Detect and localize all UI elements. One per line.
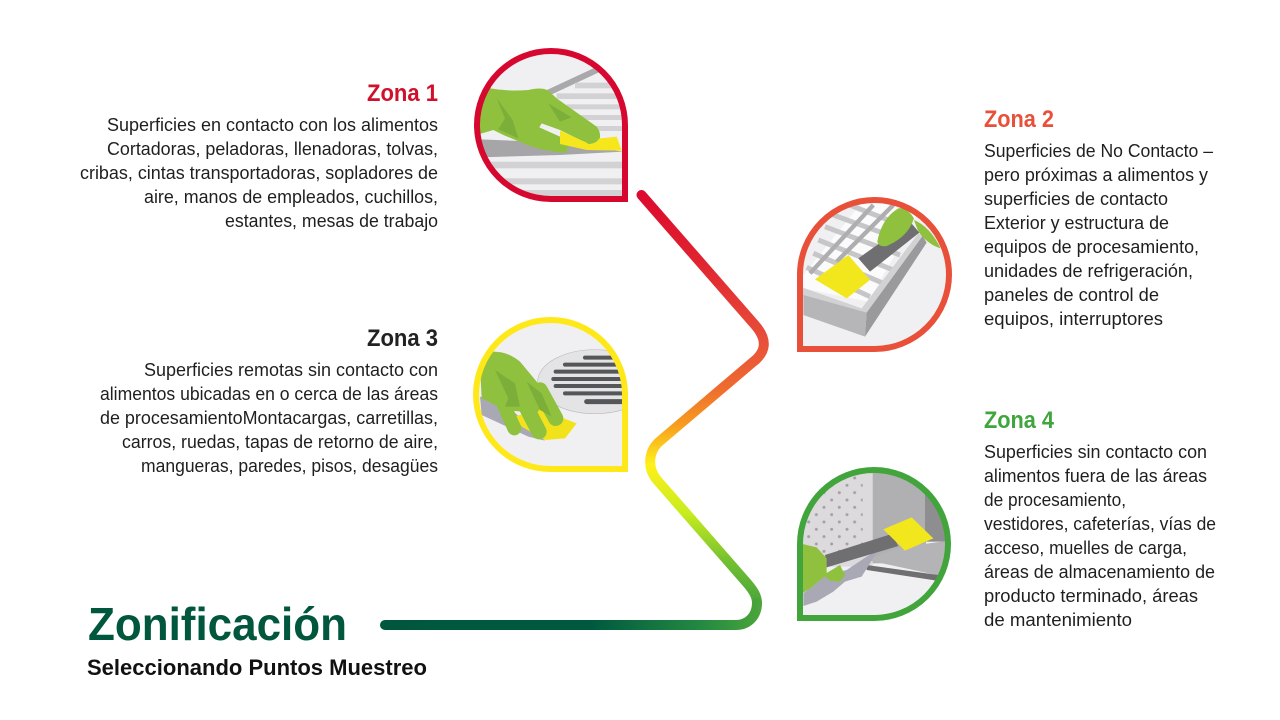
text block: Zona 1 description: Superficies en contacto con los alimentos bbox=[107, 115, 438, 135]
title: Zonificación bbox=[88, 598, 347, 650]
text block: Zona 3 description: carros, ruedas, tapas de retorno de aire, bbox=[122, 432, 438, 452]
text block: Zona 1 description: Cortadoras, peladoras, llenadoras, tolvas, bbox=[107, 139, 438, 159]
text block: Zona 3 description bbox=[100, 360, 438, 476]
text block: Zona 4 description bbox=[984, 442, 1216, 630]
icon: Zona 2 sponge on metal grate bbox=[797, 197, 952, 352]
drop outline: Zona 3 bbox=[476, 320, 625, 469]
text block: Zona 4 description: vestidores, cafeterías, vías de bbox=[984, 514, 1216, 534]
panel: Zona 1 text bbox=[80, 80, 438, 231]
drop outline: Zona 4 bbox=[800, 470, 948, 618]
text block: Zona 3 description: de procesamientoMontacargas, carretillas, bbox=[100, 408, 438, 428]
text block: Zona 2 description: superficies de contacto bbox=[984, 189, 1168, 209]
text block: Zona 2 description: paneles de control de bbox=[984, 285, 1159, 305]
text block: Zona 2 description: pero próximas a alimentos y bbox=[984, 165, 1208, 185]
text block: Zona 4 description: Superficies sin contacto con bbox=[984, 442, 1207, 462]
text block: Zona 1 description bbox=[80, 115, 438, 231]
connector line: upper gradient path bbox=[642, 195, 764, 603]
heading: Zona 2: Zona 2 bbox=[984, 106, 1054, 133]
text block: Zona 3 description: alimentos ubicadas en o cerca de las áreas bbox=[100, 384, 438, 404]
text block: Zona 1 description: estantes, mesas de trabajo bbox=[225, 211, 438, 231]
text block: Zona 4 description: acceso, muelles de carga, bbox=[984, 538, 1187, 558]
text block: Zona 2 description: equipos, interruptores bbox=[984, 309, 1163, 329]
panel: Zona 3 text bbox=[100, 325, 438, 476]
connector line: lower gradient path bbox=[385, 603, 757, 625]
icon: Zona 4 sponge wiping wall corner bbox=[797, 467, 953, 622]
text block: Zona 4 description: de mantenimiento bbox=[984, 610, 1132, 630]
text block: Zona 2 description: unidades de refrigeración, bbox=[984, 261, 1193, 281]
text block: Zona 4 description: alimentos fuera de las áreas bbox=[984, 466, 1207, 486]
icon: Zona 1 gloved hand wiping grate bbox=[474, 48, 628, 202]
text block: Zona 2 description: Superficies de No Contacto – bbox=[984, 141, 1213, 161]
drop outline: Zona 1 bbox=[477, 51, 625, 199]
icon: Zona 3 gloved hand wiping drain bbox=[473, 317, 628, 472]
text block: Zona 2 description bbox=[984, 141, 1213, 329]
text block: Zona 4 description: producto terminado, áreas bbox=[984, 586, 1198, 606]
text block: Zona 3 description: mangueras, paredes, pisos, desagües bbox=[141, 456, 438, 476]
subtitle: Seleccionando Puntos Muestreo bbox=[87, 655, 427, 680]
text block: Zona 4 description: de procesamiento, bbox=[984, 490, 1126, 510]
panel: Zona 4 text bbox=[984, 407, 1216, 630]
heading: Zona 1: Zona 1 bbox=[367, 80, 438, 107]
text block: Zona 2 description: equipos de procesamiento, bbox=[984, 237, 1199, 257]
text block: Zona 1 description: aire, manos de empleados, cuchillos, bbox=[144, 187, 438, 207]
heading: Zona 3: Zona 3 bbox=[367, 325, 438, 352]
text block: Zona 4 description: áreas de almacenamiento de bbox=[984, 562, 1215, 582]
text block: Zona 2 description: Exterior y estructura de bbox=[984, 213, 1169, 233]
heading: Zona 4: Zona 4 bbox=[984, 407, 1055, 434]
drop outline: Zona 2 bbox=[800, 200, 949, 349]
text block: Zona 3 description: Superficies remotas sin contacto con bbox=[144, 360, 438, 380]
panel: Zona 2 text bbox=[984, 106, 1213, 329]
text block: Zona 1 description: cribas, cintas transportadoras, sopladores de bbox=[80, 163, 438, 183]
